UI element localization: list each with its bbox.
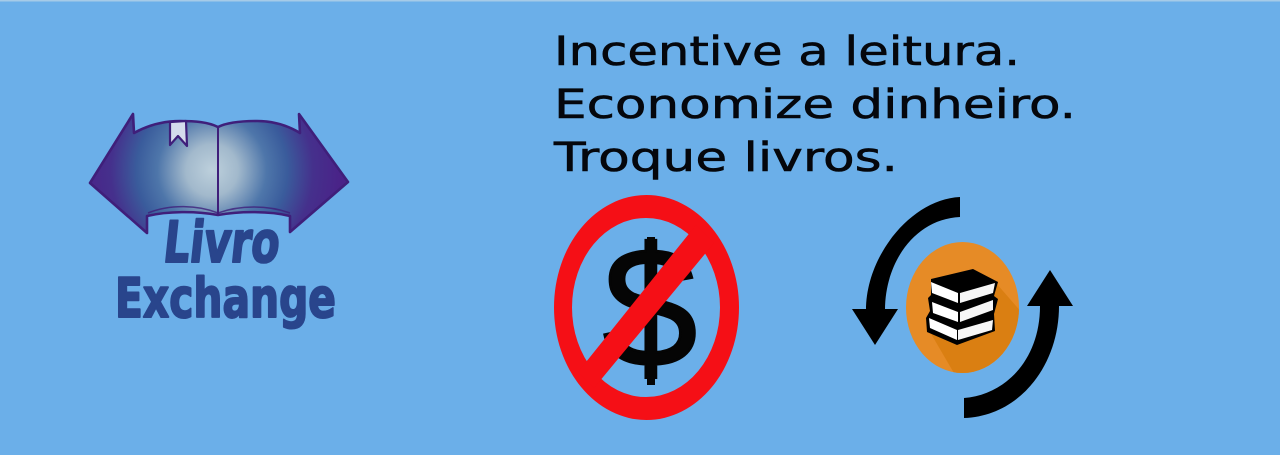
- icon: no money sign: [554, 195, 739, 420]
- bottom book pages: [929, 318, 993, 340]
- red slash: [578, 225, 714, 388]
- arrow: right upward: [964, 270, 1073, 418]
- icon: book exchange cycle: [852, 197, 1073, 418]
- logo: Livro Exchange: [90, 114, 348, 330]
- arrow: left downward: [852, 197, 960, 345]
- logo text: Exchange: Exchange: [115, 267, 336, 330]
- icon: bookmark: [170, 121, 187, 146]
- line: Incentive a leitura.: Incentive a leitura.: [554, 29, 1020, 75]
- icon: open book with arrows: [90, 114, 348, 233]
- books silhouette: [926, 269, 998, 345]
- top edge highlight: [0, 0, 1280, 2]
- orange circle: [906, 242, 1019, 373]
- icon: dollar sign: $: [603, 213, 697, 403]
- top book pages: [931, 282, 995, 303]
- icon: stack of books: [926, 269, 998, 345]
- line: Troque livros.: Troque livros.: [553, 135, 898, 181]
- headline text: [553, 29, 1076, 181]
- line: Economize dinheiro.: Economize dinheiro.: [554, 82, 1076, 128]
- logo text: Livro: Livro: [160, 210, 283, 276]
- middle book pages: [932, 300, 993, 322]
- red prohibition ring: [554, 195, 739, 420]
